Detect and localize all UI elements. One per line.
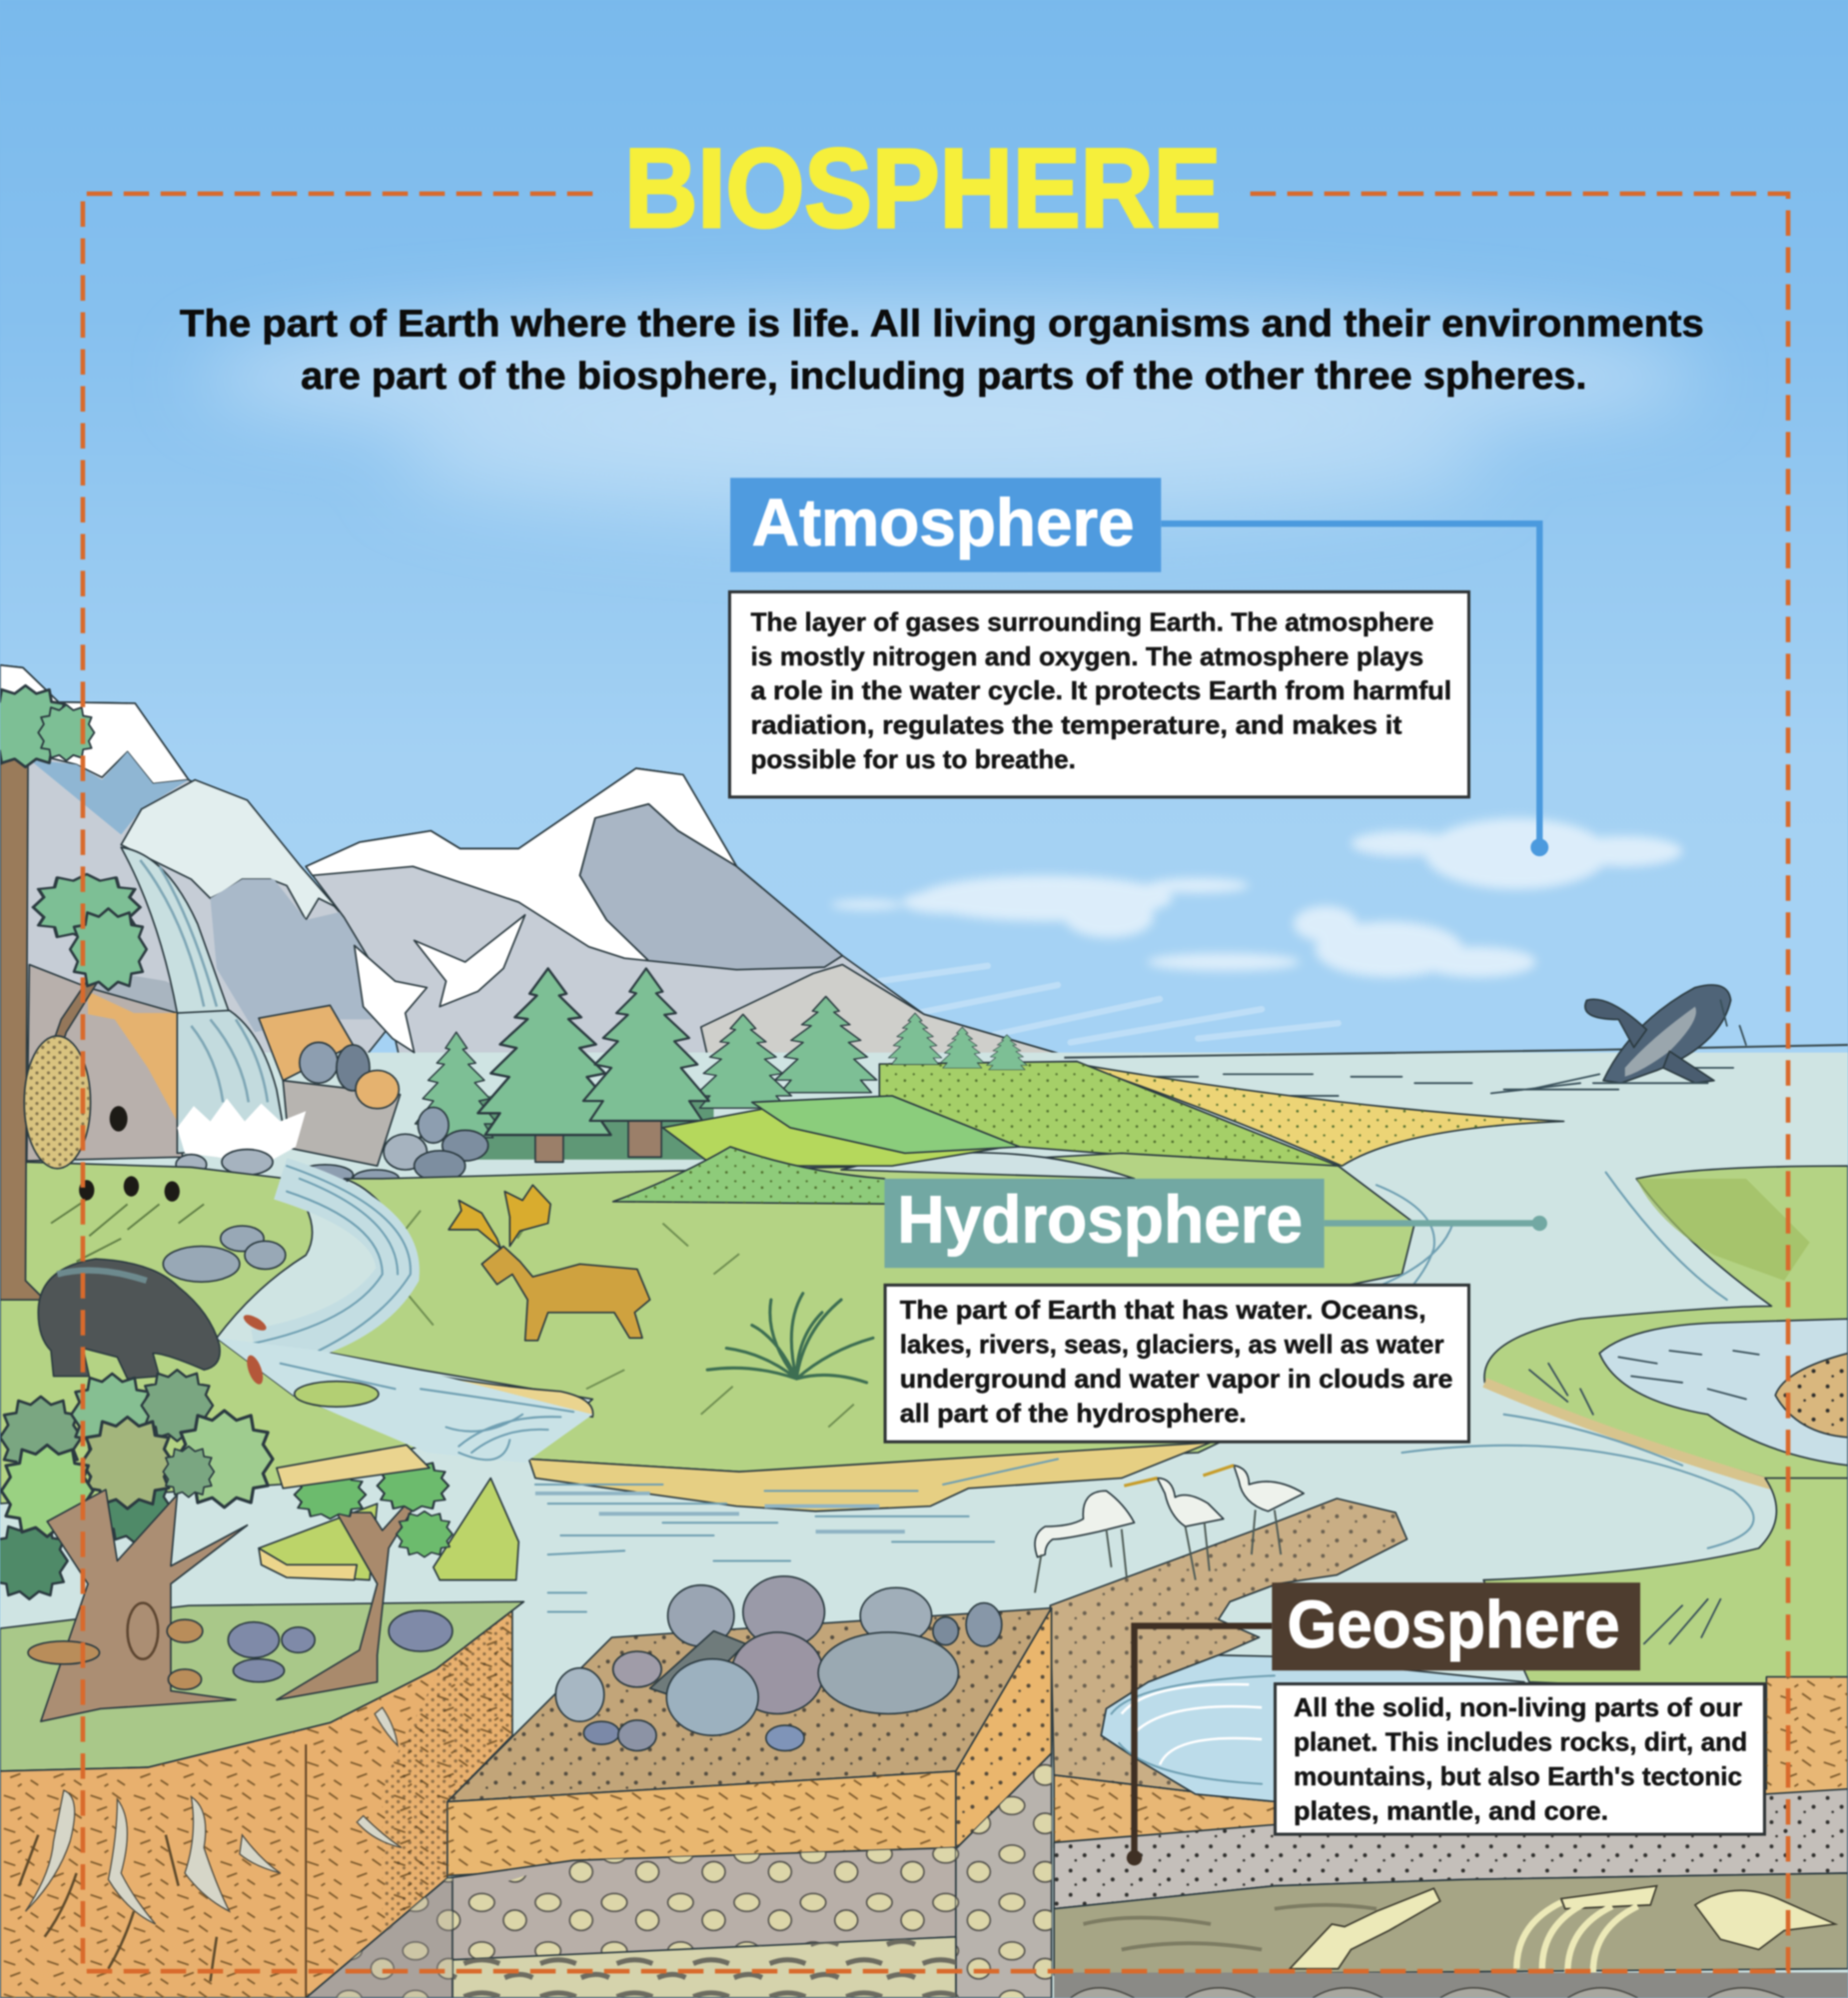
hydrosphere description: all part of the hydrosphere.: [900, 1398, 1247, 1428]
intro text: The part of Earth where there is life. All living organisms and their environments: [180, 303, 1704, 346]
bees: [79, 1106, 180, 1202]
hydrosphere description: [885, 1285, 1468, 1442]
lower right meadow: [1371, 1172, 1848, 1694]
geosphere description: All the solid, non-living parts of our: [1294, 1692, 1742, 1722]
coastal hills: [879, 1061, 1563, 1166]
pine forest: [416, 968, 1027, 1162]
atmosphere description: [729, 591, 1468, 797]
atmosphere description: is mostly nitrogen and oxygen. The atmosphere plays: [750, 641, 1423, 671]
big tree foliage: [0, 1370, 273, 1599]
sky background: [0, 0, 1848, 1275]
intro text: are part of the biosphere, including parts of the other three spheres.: [301, 355, 1586, 398]
deer: [449, 1185, 650, 1341]
hydrosphere connector dot: [1532, 1216, 1547, 1231]
grass tuft: [707, 1294, 873, 1383]
land left of the stream: [0, 1162, 421, 1503]
geological strata right: [1054, 1677, 1848, 1998]
sand bar left: [277, 1445, 430, 1489]
egrets: [1035, 1466, 1304, 1592]
right land and lagoon: [1484, 1166, 1848, 1541]
left cliff, waterfall and rocks: [27, 847, 488, 1188]
geosphere description: plates, mantle, and core.: [1294, 1795, 1608, 1825]
atmosphere label: Atmosphere: [752, 487, 1135, 560]
stream: [217, 1166, 592, 1463]
geosphere description: planet. This includes rocks, dirt, and: [1294, 1727, 1747, 1757]
central rock block: [306, 1576, 1052, 1998]
clouds: [831, 818, 1682, 1042]
whale: [1529, 985, 1746, 1090]
panel: atmosphere: [729, 478, 1548, 856]
big tree trunk and rocks on plateau: [28, 1490, 453, 1721]
river ripples: [447, 1415, 1058, 1612]
atmosphere description: radiation, regulates the temperature, and makes it: [750, 710, 1402, 740]
intro text: [180, 303, 1704, 398]
atmosphere description: The layer of gases surrounding Earth. The atmosphere: [750, 606, 1433, 636]
geosphere description: mountains, but also Earth's tectonic: [1294, 1761, 1742, 1791]
central meadow: [319, 1096, 1465, 1511]
hydrosphere label: Hydrosphere: [897, 1184, 1303, 1258]
sky glow behind intro text: [198, 302, 1701, 528]
atmosphere description: a role in the water cycle. It protects Earth from harmful: [750, 675, 1451, 705]
soil block left: [0, 1601, 523, 1998]
hydrosphere description: The part of Earth that has water. Oceans,: [900, 1295, 1426, 1325]
atmosphere description: possible for us to breathe.: [750, 744, 1076, 774]
white birds: [355, 915, 525, 1053]
geosphere label: Geosphere: [1288, 1588, 1620, 1662]
hydrosphere description: underground and water vapor in clouds are: [900, 1364, 1452, 1394]
title: BIOSPHERE: [624, 125, 1221, 251]
atmosphere connector: [1161, 523, 1539, 847]
atmosphere connector dot: [1530, 838, 1548, 856]
hydrosphere connector: [1325, 1221, 1539, 1226]
left trunk and foliage: [0, 685, 147, 1300]
small tree and islets: [259, 1461, 518, 1700]
far mountains: [0, 665, 1077, 1147]
hydrosphere description: lakes, rivers, seas, glaciers, as well as water: [900, 1330, 1444, 1360]
bear: [38, 1259, 220, 1379]
sea and water base: [0, 1045, 1848, 1998]
sand spit and pool: [1050, 1498, 1524, 1802]
panel: hydrosphere: [884, 1179, 1547, 1442]
geosphere connector: [1135, 1626, 1272, 1858]
panel: geosphere: [1127, 1582, 1764, 1865]
geosphere description: [1275, 1684, 1764, 1834]
geosphere connector dot: [1127, 1850, 1142, 1865]
